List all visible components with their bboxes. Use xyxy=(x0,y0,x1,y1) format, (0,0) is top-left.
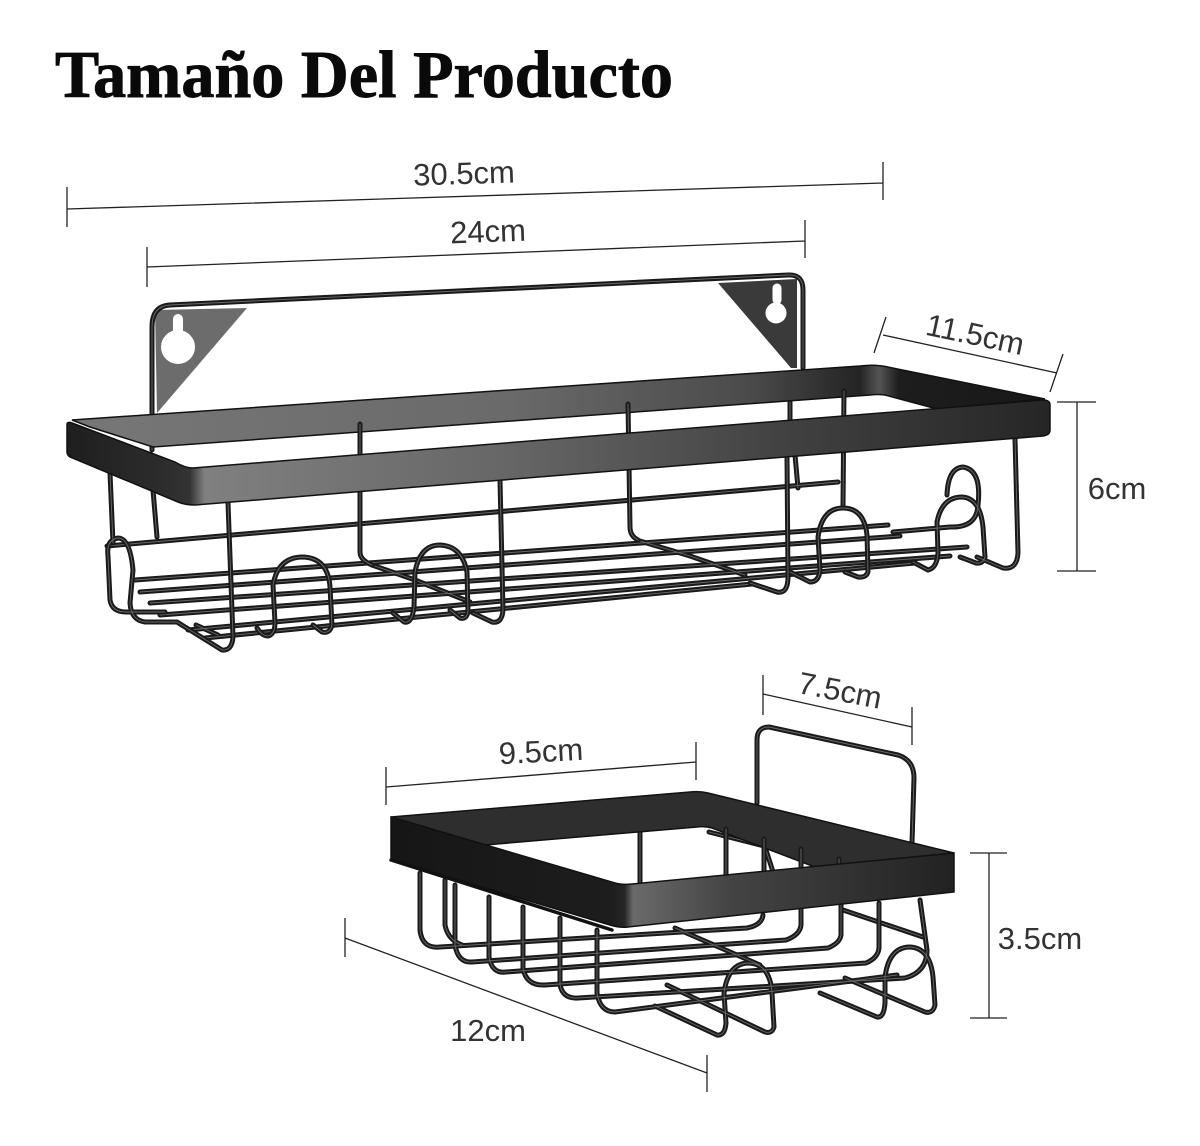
rear uprights xyxy=(726,829,839,880)
mounting plate with keyholes xyxy=(107,275,838,546)
dimension: 7.5cm xyxy=(763,665,912,745)
dimension: 3.5cm: 3.5cm xyxy=(998,921,1082,956)
handle and rear wires xyxy=(640,727,923,937)
dimension: 3.5cm xyxy=(970,853,1082,1018)
dimension: 24cm inner width xyxy=(147,213,805,287)
left lip xyxy=(391,860,612,930)
dimension: 24cm inner width: 24cm xyxy=(449,213,526,250)
front rim band xyxy=(67,400,1050,505)
dimension: 11.5cm depth xyxy=(874,307,1063,392)
front rim band xyxy=(391,817,954,927)
dimension: 30.5cm overall width: 30.5cm xyxy=(413,154,515,193)
rear rim band xyxy=(391,792,954,869)
basket floor bars xyxy=(135,525,967,638)
rear rim band xyxy=(72,365,1045,447)
basket wires and hooks xyxy=(420,873,935,1035)
dimension: 11.5cm depth: 11.5cm xyxy=(923,307,1027,362)
small soap basket xyxy=(391,727,954,1035)
dimension: 6cm height: 6cm xyxy=(1088,471,1146,506)
dimension: 9.5cm: 9.5cm xyxy=(498,732,584,771)
rear uprights xyxy=(360,391,844,565)
title: Tamaño Del Producto xyxy=(55,38,673,112)
dimension: 9.5cm xyxy=(386,732,696,805)
dimension: 7.5cm: 7.5cm xyxy=(795,665,885,716)
dimension: 12cm xyxy=(345,918,707,1092)
dimension: 6cm height xyxy=(1057,402,1146,571)
front uprights and hooks xyxy=(108,438,1018,650)
large shelf basket xyxy=(67,275,1050,650)
dimension: 12cm: 12cm xyxy=(450,1013,526,1048)
dimension: 30.5cm overall width xyxy=(67,154,883,227)
